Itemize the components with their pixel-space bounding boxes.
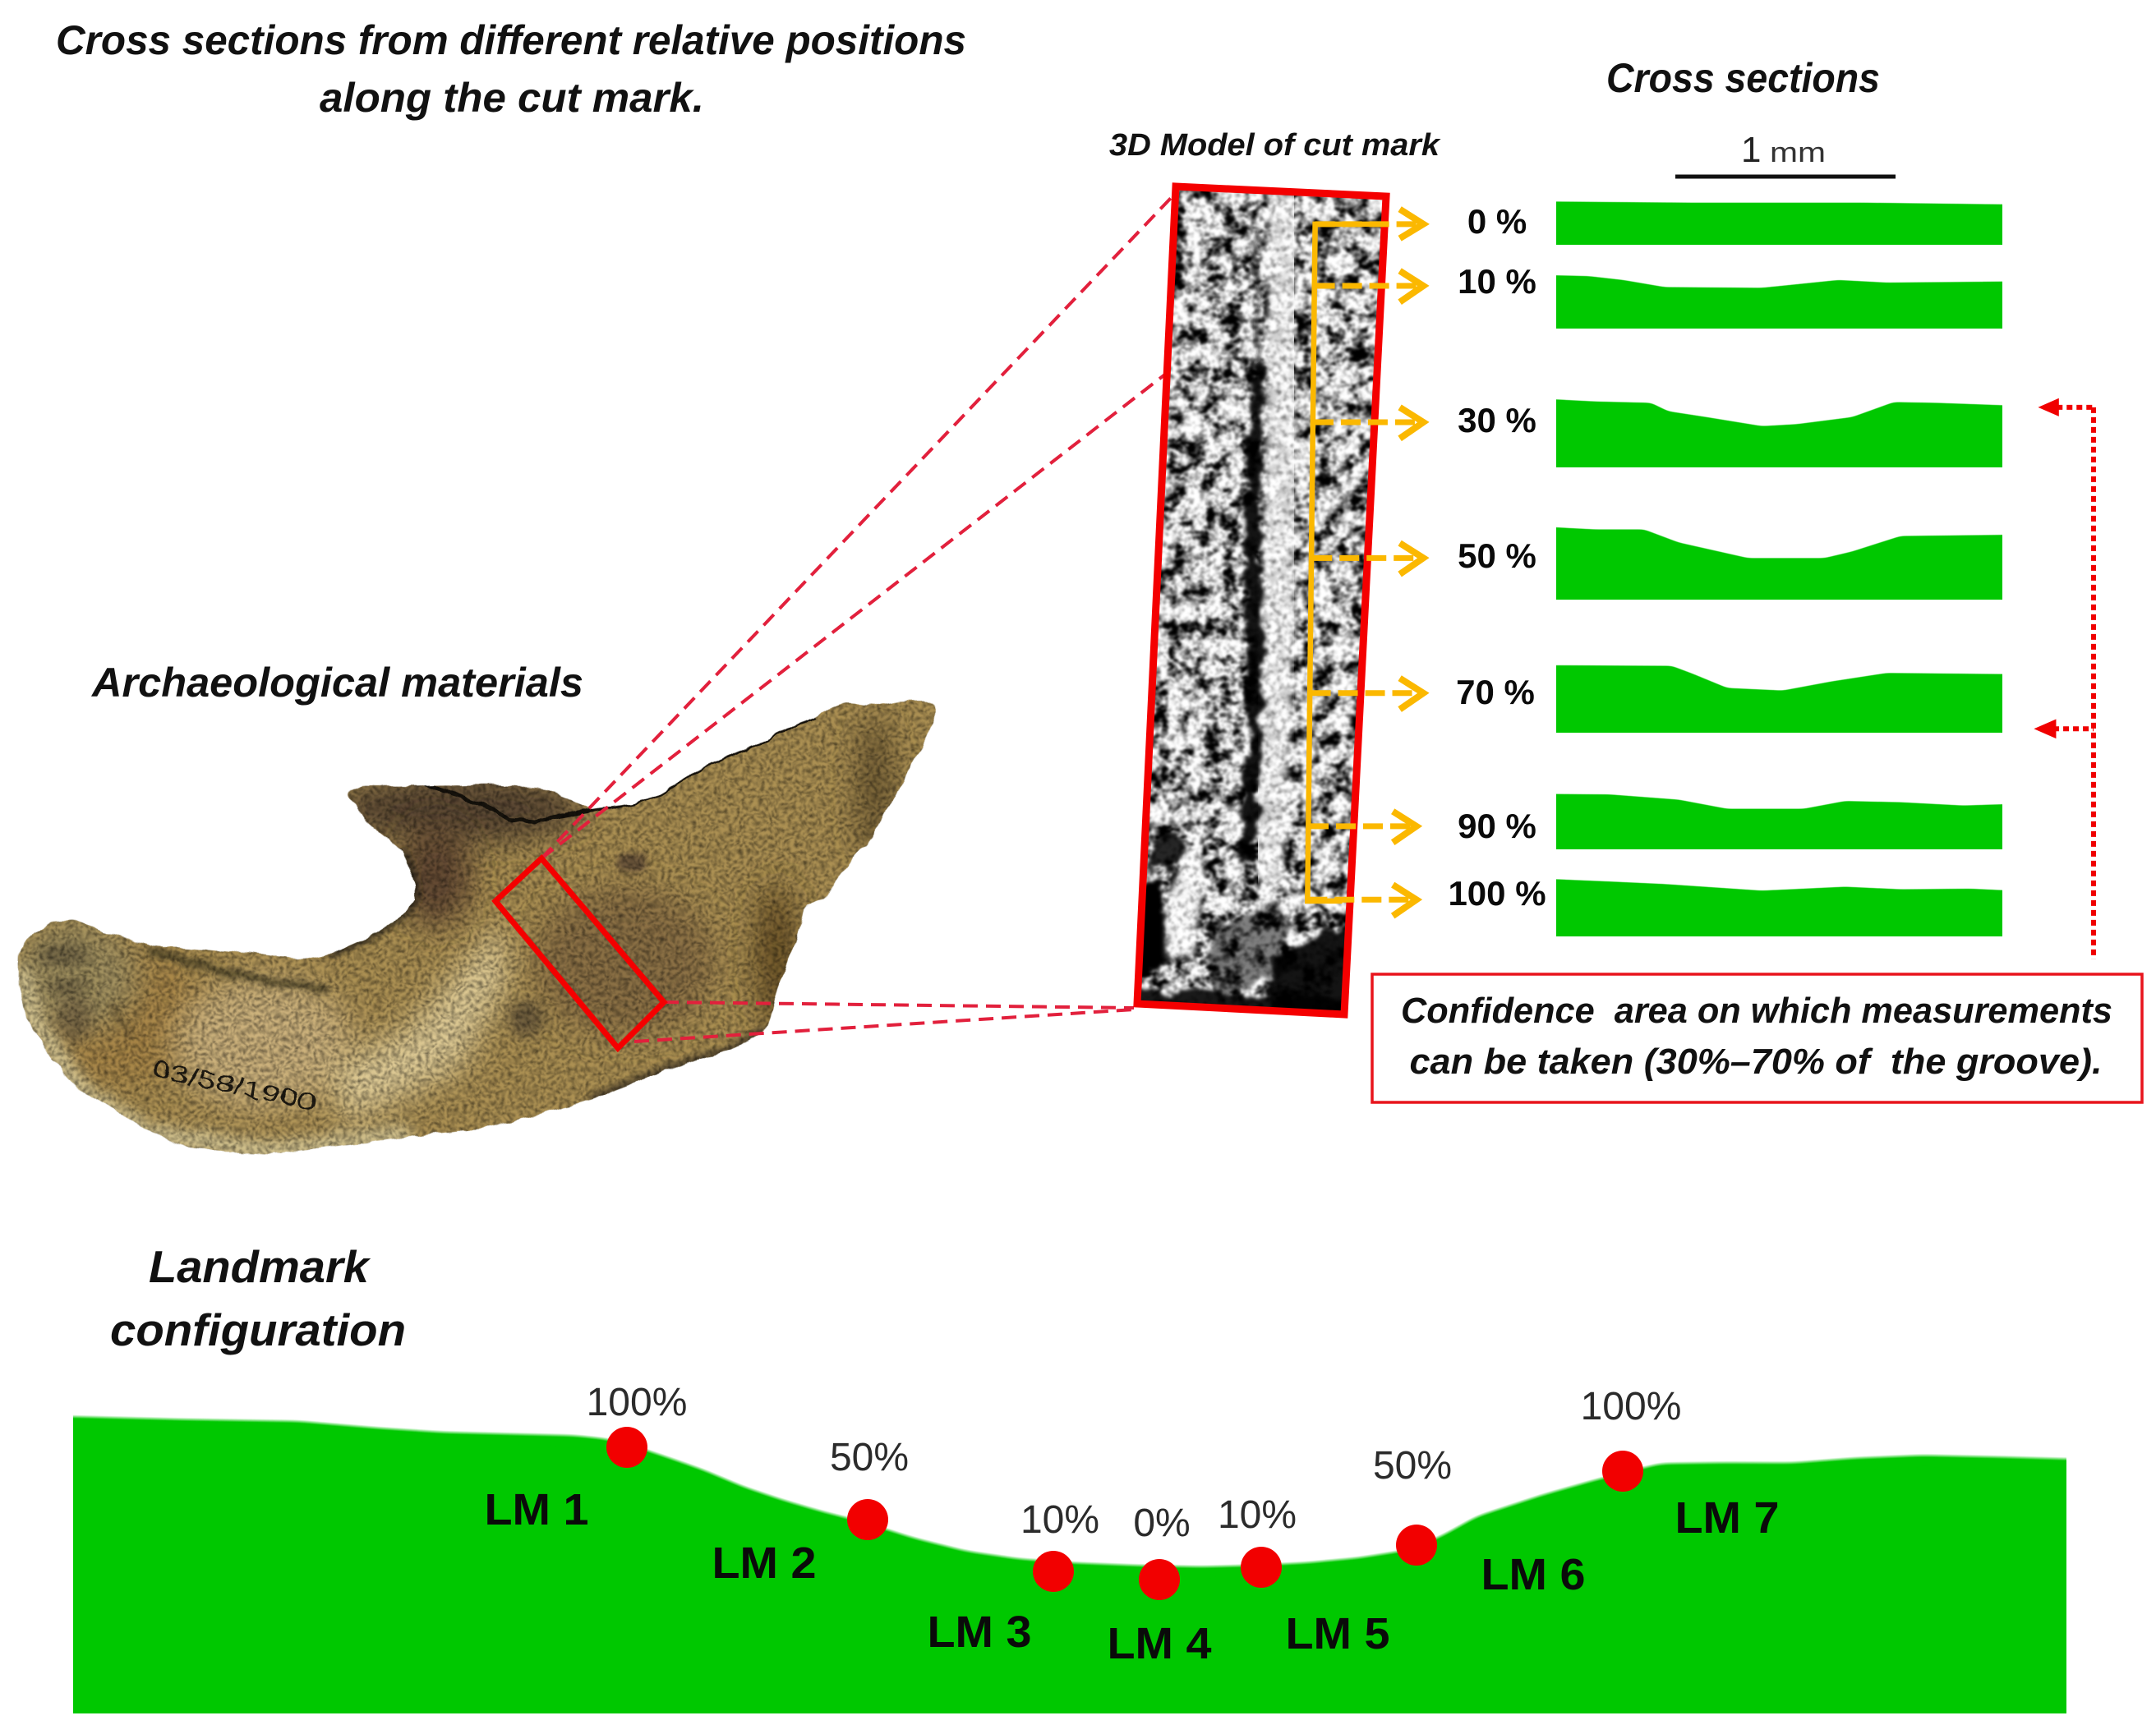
- landmark percentage labels: 10%: [1218, 1493, 1297, 1537]
- landmark groove profile: [49, 1416, 2093, 1734]
- cross section 70%: [1556, 665, 2002, 733]
- inscription on bone: 03/58/1900: [150, 1056, 319, 1116]
- cross section 30%: [1556, 399, 2002, 467]
- cross section 0%: [1556, 201, 2002, 245]
- heading: landmark configuration: Landmark: [149, 1241, 371, 1292]
- landmark names: LM 6: [1481, 1550, 1586, 1599]
- heading: archaeological materials: Archaeological materials: [90, 660, 583, 706]
- LM 4 point: [1139, 1559, 1180, 1600]
- heading: landmark configuration: configuration: [110, 1304, 406, 1355]
- heading: 3D model of cut mark: 3D Model of cut mark: [1109, 128, 1441, 163]
- heading: landmark configuration: [110, 1241, 406, 1355]
- landmark percentage labels: 50%: [1373, 1444, 1452, 1488]
- heading: cross sections: Cross sections: [1606, 55, 1880, 101]
- landmark percentage labels: 100%: [1581, 1385, 1681, 1428]
- landmark names: LM 5: [1285, 1609, 1390, 1658]
- yellow bracket and arrows to cross sections: [1307, 209, 1423, 916]
- landmark percentage labels: 100%: [587, 1381, 687, 1424]
- LM 2 point: [847, 1499, 888, 1540]
- landmark names: LM 4: [1108, 1619, 1211, 1668]
- percentage labels for cross sections: 0 %: [1467, 202, 1527, 241]
- scale bar: 1 mm: mm: [1770, 137, 1826, 168]
- red box: cut mark location on bone: [495, 858, 664, 1048]
- title: Cross sections from different relative positions: [56, 17, 966, 63]
- callout: confidence area: Confidence area on which measurements: [1401, 991, 2112, 1031]
- percentage labels for cross sections: 90 %: [1458, 807, 1536, 845]
- LM 3 point: [1033, 1551, 1074, 1592]
- cross section 90%: [1556, 793, 2002, 849]
- callout: confidence area: can be taken (30%–70% of the groove).: [1410, 1042, 2102, 1082]
- red dotted arrows marking the 30%-70% confidence range: [2034, 398, 2094, 959]
- landmark names: LM 1: [485, 1485, 588, 1534]
- landmark points: [606, 1427, 1643, 1600]
- title: along the cut mark.: [320, 75, 704, 121]
- cross section 50%: [1556, 527, 2002, 600]
- LM 1 point: [606, 1427, 647, 1468]
- landmark percentage labels: [587, 1381, 1681, 1545]
- LM 6 point: [1396, 1525, 1437, 1566]
- dashed zoom lines from bone to 3D model: [541, 196, 1172, 1042]
- photo: bone fragment: [0, 690, 953, 1158]
- percentage labels for cross sections: 50 %: [1458, 536, 1536, 575]
- percentage labels for cross sections: 10 %: [1458, 262, 1536, 301]
- landmark names: LM 3: [927, 1608, 1032, 1657]
- cross section 10%: [1556, 274, 2002, 329]
- title: [56, 17, 966, 121]
- landmark percentage labels: 10%: [1020, 1498, 1099, 1542]
- cross section 100%: [1556, 879, 2002, 936]
- scale bar: 1 mm: 1: [1741, 130, 1761, 170]
- landmark names: LM 2: [712, 1539, 817, 1588]
- percentage labels for cross sections: 30 %: [1458, 401, 1536, 439]
- landmark names: [485, 1485, 1780, 1668]
- landmark names: LM 7: [1675, 1493, 1780, 1543]
- landmark percentage labels: 0%: [1133, 1502, 1191, 1545]
- LM 7 point: [1602, 1451, 1643, 1492]
- LM 5 point: [1241, 1547, 1282, 1588]
- green cross sections: [1556, 201, 2002, 936]
- scale bar: 1 mm: [1675, 130, 1896, 177]
- landmark percentage labels: 50%: [830, 1436, 909, 1479]
- percentage labels for cross sections: [1448, 202, 1546, 913]
- image: 3D model of cut mark: [1126, 186, 1386, 1027]
- percentage labels for cross sections: 100 %: [1448, 874, 1546, 913]
- percentage labels for cross sections: 70 %: [1456, 673, 1535, 711]
- callout: confidence area: [1372, 974, 2142, 1102]
